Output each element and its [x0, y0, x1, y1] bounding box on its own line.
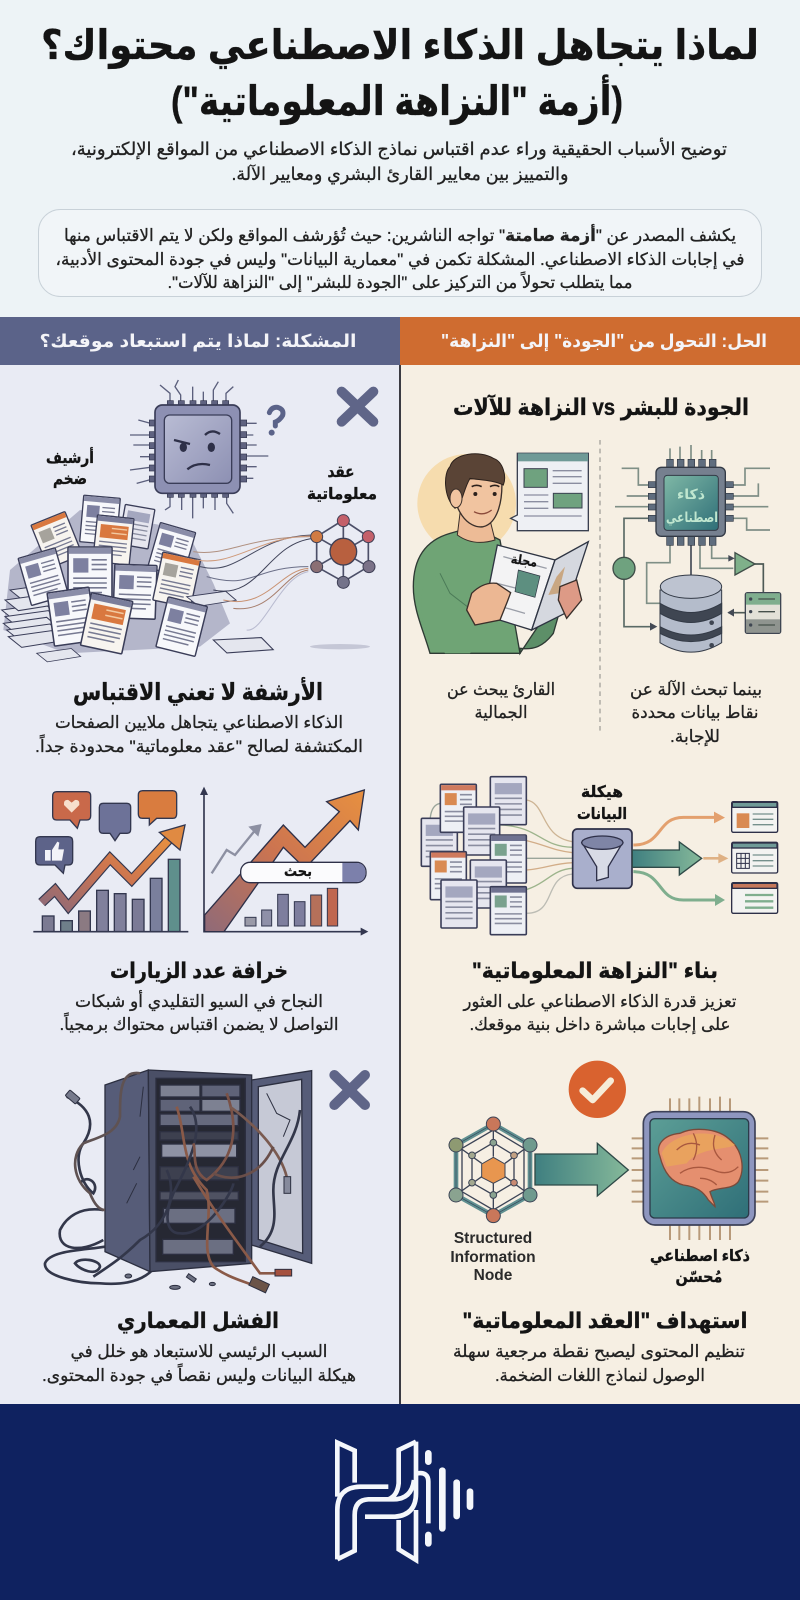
rear cables — [45, 1097, 167, 1284]
label: information nodes: معلوماتية — [307, 486, 377, 503]
machine diagram — [613, 445, 781, 652]
section text: architectural failure: السبب الرئيسي للاستبعاد هو خلل في — [70, 1342, 328, 1362]
illustration: confused chip and document pile — [2, 380, 375, 662]
label: huge archive — [46, 447, 94, 488]
label: structured information node: Information — [450, 1249, 536, 1266]
label: huge archive: أرشيف — [46, 447, 94, 467]
label: information nodes — [307, 464, 377, 503]
section text: architectural failure: الفشل المعماري — [117, 1308, 279, 1334]
data threads — [193, 535, 313, 630]
section text: building information integrity: تعزيز قدرة الذكاء الاصطناعي على العثور — [463, 992, 737, 1012]
label: enhanced AI — [650, 1248, 750, 1286]
flow threads — [430, 800, 573, 913]
label: search: بحث — [284, 863, 312, 879]
label: structured information node — [450, 1230, 536, 1284]
caption: machine — [630, 679, 762, 746]
panel: solution background — [400, 365, 800, 1404]
icon: x mark — [342, 392, 373, 422]
section text: traffic myth — [60, 958, 338, 1034]
callout: في إجابات الذكاء الاصطناعي. المشكلة تكمن في "معمارية البيانات" وليس في جودة المحتوى الأدبية، — [56, 249, 744, 270]
section text: targeting information nodes — [453, 1308, 748, 1386]
section text: archiving is not citing — [35, 677, 363, 757]
tangled cables — [75, 1073, 300, 1287]
dashed divider — [598, 440, 601, 733]
label: data structuring: هيكلة — [581, 784, 623, 801]
label: huge archive: ضخم — [53, 471, 87, 488]
label: magazine: مجلة — [510, 551, 538, 570]
subtitle: توضيح الأسباب الحقيقية وراء عدم اقتباس نماذج الذكاء الاصطناعي من المواقع الإلكترونية، — [71, 138, 727, 160]
label: AI inside chip — [666, 486, 718, 526]
scattered documents — [421, 777, 526, 935]
title: (أزمة "النزاهة المعلوماتية") — [171, 74, 623, 125]
subtitle: والتمييز بين معايير القارئ البشري ومعايير الآلة. — [232, 163, 568, 185]
icon: AI chip with brain — [632, 1097, 768, 1240]
header bar: problem — [0, 317, 400, 365]
reader with magazine — [413, 454, 588, 653]
section text: architectural failure: هيكلة البيانات وليس نقصاً في جودة المحتوى. — [42, 1362, 356, 1386]
section text: traffic myth: التواصل لا يضمن اقتباس محتواك برمجياً. — [60, 1011, 338, 1034]
section text: traffic myth: خرافة عدد الزيارات — [110, 958, 288, 984]
footer — [0, 1404, 800, 1600]
section text: building information integrity — [463, 958, 737, 1034]
cracks — [127, 1087, 290, 1203]
speech bubble with page — [511, 453, 588, 531]
callout: مما يتطلب تحولاً من التركيز على "الجودة للبشر" إلى "النزاهة للآلات". — [168, 271, 632, 292]
illustration: structuring data funnel — [421, 777, 778, 935]
header bar: problem: المشكلة: لماذا يتم استبعاد موقعك؟ — [40, 331, 356, 352]
document pile — [2, 495, 274, 662]
icon: funnel — [573, 829, 632, 888]
title — [41, 22, 759, 125]
section text: archiving is not citing: الأرشفة لا تعني الاقتباس — [73, 677, 323, 706]
label: enhanced AI: ذكاء اصطناعي — [650, 1248, 750, 1266]
social bar chart — [33, 825, 188, 932]
illustration: structured node to enhanced AI — [449, 1061, 768, 1240]
social icons — [36, 791, 177, 873]
header bar: solution — [400, 317, 800, 365]
plugs and debris — [65, 1090, 292, 1293]
label: data structuring: البيانات — [577, 806, 627, 823]
label: structured information node: Node — [474, 1267, 513, 1284]
label: enhanced AI: مُحسّن — [676, 1269, 722, 1286]
structured output cards — [732, 802, 778, 913]
caption: machine: بينما تبحث الآلة عن — [630, 679, 762, 699]
icon: x mark — [334, 1075, 365, 1105]
label: structured information node: Structured — [454, 1230, 532, 1247]
header bar: solution: الحل: التحول من "الجودة" إلى "النزاهة" — [441, 331, 767, 352]
section text: archiving is not citing: الذكاء الاصطناعي يتجاهل ملايين الصفحات — [55, 713, 343, 733]
section text: architectural failure — [42, 1308, 356, 1386]
caption: reader: الجمالية — [474, 703, 528, 722]
label: AI inside chip: ذكاء — [677, 486, 705, 502]
caption: machine: للإجابة. — [670, 727, 720, 746]
caption: reader: القارئ يبحث عن — [447, 680, 555, 699]
section text: targeting information nodes: تنظيم المحتوى ليصبح نقطة مرجعية سهلة — [453, 1342, 745, 1362]
label: data structuring — [577, 784, 627, 823]
label: AI inside chip: اصطناعي — [666, 509, 718, 526]
illustration: broken server rack — [45, 1070, 365, 1293]
caption: reader — [447, 680, 555, 722]
section text: targeting information nodes: استهداف "العقد المعلوماتية" — [462, 1308, 748, 1334]
callout — [38, 210, 762, 296]
illustration: reader and machine — [413, 440, 781, 733]
heading: quality vs integrity: الجودة للبشر vs النزاهة للآلات — [453, 394, 749, 421]
caption: machine: نقاط بيانات محددة — [632, 703, 758, 722]
arrows to structured outputs — [632, 812, 728, 906]
icon: structured hexagon node — [449, 1117, 537, 1223]
arrow — [535, 1143, 628, 1196]
icon: confused chip — [130, 380, 268, 518]
icon: check badge — [569, 1061, 626, 1118]
icon: information node — [311, 515, 375, 588]
callout: يكشف المصدر عن "أزمة صامتة" تواجه الناشرين: حيث تُؤرشف المواقع ولكن لا يتم الاقتباس منها — [64, 224, 736, 246]
section text: building information integrity: على إجابات مباشرة داخل بنية موقعك. — [470, 1015, 730, 1034]
section text: traffic myth: النجاح في السيو التقليدي أو شبكات — [75, 990, 323, 1012]
section text: archiving is not citing: المكتشفة لصالح "عقد معلوماتية" محدودة جداً. — [35, 733, 363, 757]
logo — [337, 1442, 470, 1560]
panel: problem background — [0, 365, 400, 1404]
section text: building information integrity: بناء "النزاهة المعلوماتية" — [472, 958, 718, 984]
icon: question mark — [269, 407, 283, 436]
section text: targeting information nodes: الوصول لنماذج اللغات الضخمة. — [495, 1366, 705, 1386]
illustration: social and search charts — [33, 787, 368, 936]
search growth chart — [200, 787, 368, 936]
server cabinet — [105, 1070, 312, 1272]
subtitle — [71, 138, 727, 185]
label: information nodes: عقد — [328, 464, 354, 481]
